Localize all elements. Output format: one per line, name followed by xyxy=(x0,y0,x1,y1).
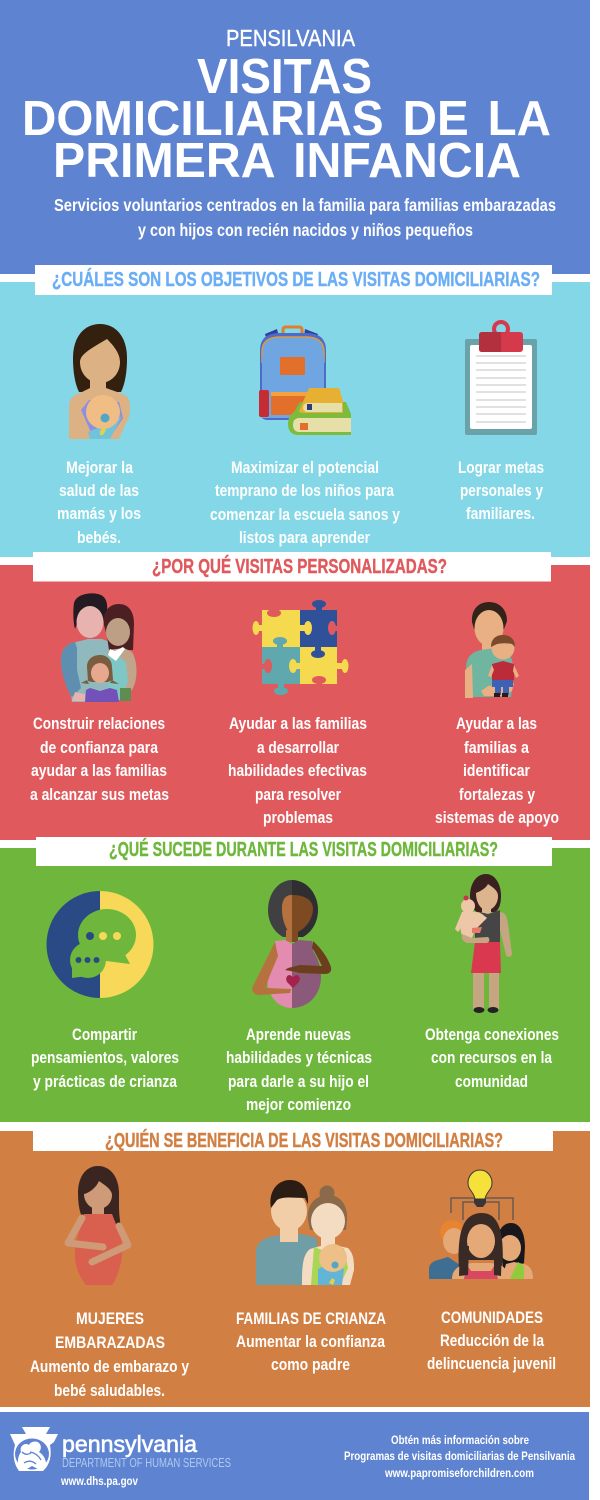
text: habilidades efectivas xyxy=(228,714,367,827)
text: compartir: Compartir xyxy=(72,1025,137,1044)
text: fortalezas y sistemas xyxy=(435,714,559,827)
text: maximizar el potencial xyxy=(210,458,400,547)
text: mujeres embarazadas: bebé saludables. xyxy=(54,1381,165,1400)
text: lograr metas: familiares. xyxy=(466,504,535,523)
icon: chat circle xyxy=(46,891,154,998)
text: mejorar la salud xyxy=(57,458,141,547)
text: construir relaciones: a alcanzar sus metas xyxy=(30,785,169,804)
panel: footer xyxy=(0,1412,589,1500)
heading bar: quién se beneficia xyxy=(33,1122,553,1152)
text: mujeres embarazadas: EMBARAZADAS xyxy=(55,1333,165,1352)
icon: family of three xyxy=(61,593,136,702)
text: obtenga conexiones: con recursos en la xyxy=(431,1048,552,1067)
text: obtenga conexiones: comunidad xyxy=(455,1072,528,1091)
panel: quién se beneficia xyxy=(0,1122,590,1407)
text: fortalezas y sistemas: identificar xyxy=(463,761,530,780)
panel: header xyxy=(0,0,590,274)
text: lograr metas xyxy=(458,458,544,523)
text: mujeres embarazadas xyxy=(30,1309,189,1400)
text: mejorar la salud: bebés. xyxy=(77,528,121,547)
text: comunidades: Reducción de la xyxy=(440,1331,544,1350)
text: maximizar el potencial: comenzar la escuela sanos y xyxy=(210,505,400,524)
heading bar: por qué xyxy=(33,552,551,582)
panel: qué sucede xyxy=(0,837,590,1122)
wordmark: pennsylvania xyxy=(62,1431,197,1457)
text: familias de crianza: Aumentar la confianza xyxy=(236,1332,385,1351)
icon: father and child xyxy=(465,602,519,698)
text: fortalezas y sistemas: Ayudar a las xyxy=(456,714,537,733)
text: aprende nuevas: Aprende nuevas xyxy=(246,1025,351,1044)
more information: www.papromiseforchildren.com xyxy=(384,1466,534,1480)
heading bar: por qué: ¿POR QUÉ VISITAS PERSONALIZADAS? xyxy=(152,555,447,578)
text: construir relaciones xyxy=(30,714,169,804)
text: familias de crianza: FAMILIAS DE CRIANZA xyxy=(236,1309,386,1328)
icon: mother breastfeeding xyxy=(69,324,130,439)
icon: clipboard xyxy=(465,322,537,435)
panel: por qué visitas personalizadas xyxy=(0,552,590,840)
text: aprende nuevas: mejor comienzo xyxy=(246,1095,351,1114)
icon: community lightbulb xyxy=(429,1170,533,1279)
text: obtenga conexiones xyxy=(425,1025,559,1091)
heading bar: qué sucede xyxy=(36,837,552,866)
text: compartir: y prácticas de crianza xyxy=(33,1072,177,1091)
title: PRIMERA INFANCIA xyxy=(53,134,521,188)
text: construir relaciones: ayudar a las familias xyxy=(31,761,167,780)
icon: couple with baby xyxy=(256,1180,354,1285)
subtitle xyxy=(54,195,556,240)
website: www.dhs.pa.gov xyxy=(60,1474,138,1488)
text: comunidades xyxy=(427,1308,556,1373)
icon: mother holding baby xyxy=(455,874,512,1013)
text: compartir: pensamientos, valores xyxy=(31,1048,179,1067)
text: familias de crianza: como padre xyxy=(271,1355,350,1374)
text: habilidades efectivas: Ayudar a las familias xyxy=(229,714,367,733)
text: lograr metas: personales y xyxy=(460,481,543,500)
text: fortalezas y sistemas: familias a xyxy=(464,738,529,757)
icon: puzzle xyxy=(252,600,348,695)
text: mujeres embarazadas: MUJERES xyxy=(76,1309,144,1328)
icon: Pennsylvania keystone logo xyxy=(10,1427,58,1471)
subtitle: y con hijos con recién nacidos y niños pequeños xyxy=(138,220,473,240)
title: VISITAS xyxy=(197,50,372,104)
text: habilidades efectivas: problemas xyxy=(263,808,333,827)
text: mejorar la salud: mamás y los xyxy=(57,504,141,523)
heading bar: objetivos xyxy=(35,265,552,295)
text: mejorar la salud: Mejorar la xyxy=(66,458,133,477)
text: comunidades: delincuencia juvenil xyxy=(427,1354,556,1373)
department name: DEPARTMENT OF HUMAN SERVICES xyxy=(62,1456,231,1470)
state label: PENSILVANIA xyxy=(226,25,356,51)
panel: objetivos xyxy=(0,265,590,557)
text: aprende nuevas: habilidades y técnicas xyxy=(226,1048,372,1067)
text: familias de crianza xyxy=(236,1309,386,1374)
text: habilidades efectivas: para resolver xyxy=(255,785,341,804)
text: maximizar el potencial: temprano de los niños para xyxy=(215,481,394,500)
title: DOMICILIARIAS DE LA xyxy=(22,92,551,146)
icon: pregnant woman portrait xyxy=(68,1166,128,1285)
text: construir relaciones: de confianza para xyxy=(40,738,158,757)
more information xyxy=(344,1433,575,1480)
text: lograr metas: Lograr metas xyxy=(458,458,544,477)
icon: backpack and books xyxy=(259,327,351,435)
text: habilidades efectivas: a desarrollar xyxy=(257,738,339,757)
icon: pregnant woman xyxy=(252,880,331,1008)
text: fortalezas y sistemas: sistemas de apoyo xyxy=(435,808,559,827)
text: fortalezas y sistemas: fortalezas y xyxy=(459,785,535,804)
text: construir relaciones: Construir relaciones xyxy=(33,714,165,733)
text: habilidades efectivas: habilidades efectivas xyxy=(228,761,367,780)
title xyxy=(22,50,551,188)
text: aprende nuevas: para darle a su hijo el xyxy=(228,1072,369,1091)
text: compartir xyxy=(31,1025,179,1091)
text: mujeres embarazadas: Aumento de embarazo y xyxy=(30,1357,189,1376)
text: aprende nuevas xyxy=(226,1025,372,1114)
more information: Obtén más información sobre xyxy=(391,1433,529,1447)
text: maximizar el potencial: listos para aprender xyxy=(239,528,370,547)
text: obtenga conexiones: Obtenga conexiones xyxy=(425,1025,559,1044)
text: comunidades: COMUNIDADES xyxy=(441,1308,543,1327)
text: maximizar el potencial: Maximizar el potencial xyxy=(231,458,379,477)
text: mejorar la salud: salud de las xyxy=(59,481,139,500)
